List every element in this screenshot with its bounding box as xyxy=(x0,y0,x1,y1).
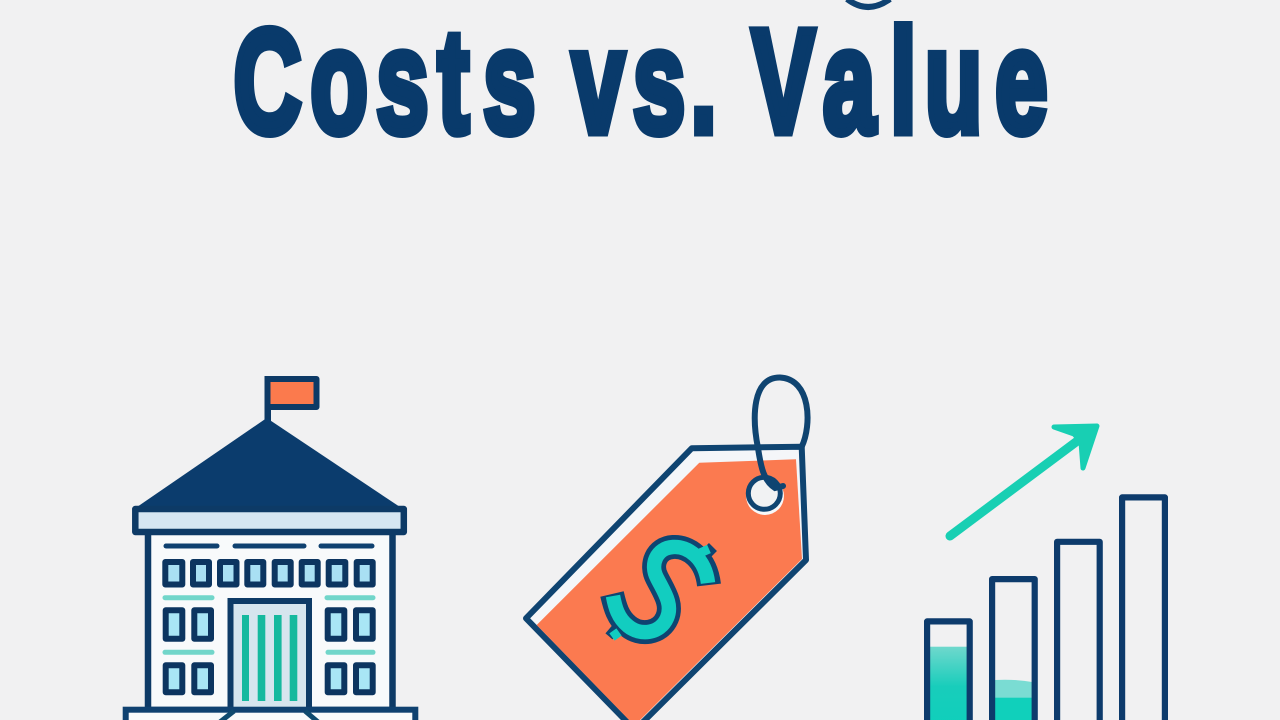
chart bars xyxy=(927,497,1165,720)
growth arrow xyxy=(950,426,1097,536)
teal accent lines xyxy=(165,598,373,652)
tag outline xyxy=(526,447,806,720)
middle and lower windows xyxy=(166,610,373,692)
bar 2 fill xyxy=(995,680,1032,720)
title xyxy=(234,0,1048,164)
top window row xyxy=(165,562,373,584)
upper frieze lines xyxy=(166,544,372,548)
cornice xyxy=(135,509,404,532)
bar chart with growth arrow xyxy=(927,426,1165,720)
tag orange face xyxy=(537,459,802,720)
building wall xyxy=(148,530,392,710)
dollar sign xyxy=(610,547,712,637)
icon: price tag xyxy=(526,377,808,720)
roof xyxy=(137,418,400,513)
base step xyxy=(126,710,415,720)
icon: university building xyxy=(126,376,415,720)
clipped descender of the cropped heading line xyxy=(847,0,890,7)
string loop xyxy=(755,377,808,488)
flag xyxy=(264,376,316,422)
bar 1 fill xyxy=(930,647,967,720)
title text: Costs vs. Value: Costs vs. Value xyxy=(234,0,1048,164)
door xyxy=(230,601,309,710)
tag hole xyxy=(746,477,784,515)
